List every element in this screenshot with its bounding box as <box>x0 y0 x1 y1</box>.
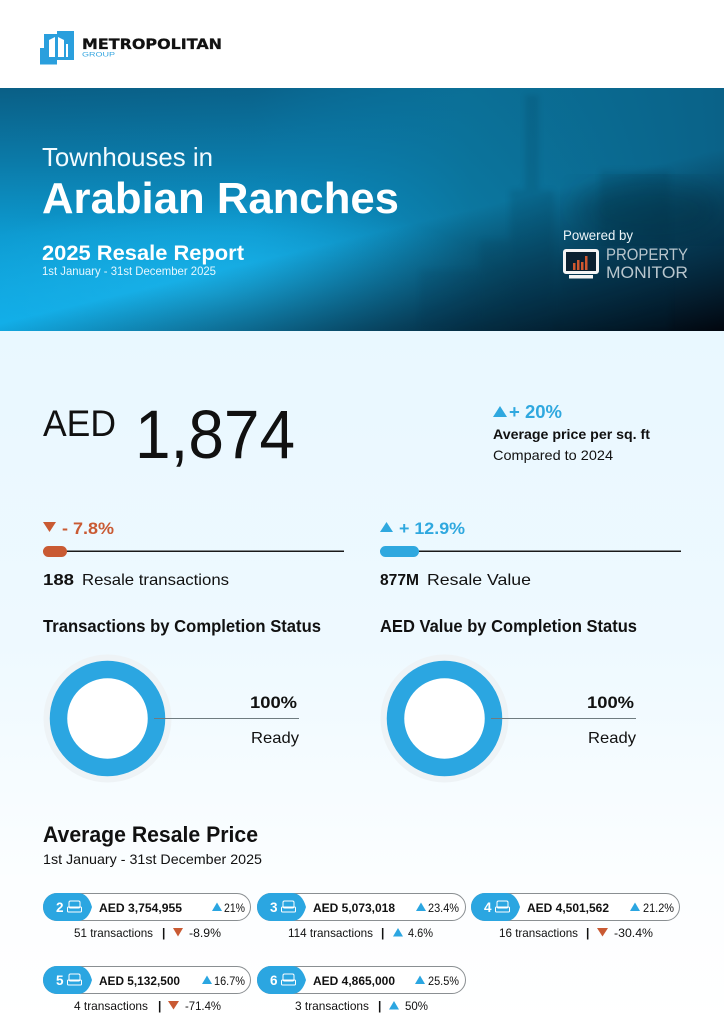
price card: 6 bedrooms: 50% <box>405 999 428 1013</box>
change value: + 12.9% <box>399 519 465 538</box>
icon: logo mark <box>40 31 74 64</box>
price card: 5 bedrooms <box>43 966 250 1013</box>
price card: 2 bedrooms: AED 3,754,955 <box>99 901 182 915</box>
price card: 3 bedrooms: AED 5,073,018 <box>313 901 395 915</box>
price card: 3 bedrooms: 114 transactions <box>288 926 373 940</box>
price card: 6 bedrooms: | <box>378 999 381 1013</box>
powered by Property Monitor <box>563 227 688 282</box>
price card: 5 bedrooms: -71.4% <box>185 999 221 1013</box>
price card: 5 bedrooms: 16.7% <box>214 974 245 988</box>
currency: AED <box>43 403 116 444</box>
price card: 6 bedrooms: AED 4,865,000 <box>313 974 395 988</box>
price card: 4 bedrooms: AED 4,501,562 <box>527 901 609 915</box>
stat: resale transactions <box>43 519 344 589</box>
price card: 5 bedrooms: AED 5,132,500 <box>99 974 180 988</box>
icon: bed <box>282 901 296 912</box>
price card: 4 bedrooms: 21.2% <box>643 901 674 915</box>
heading: average resale price: Average Resale Price <box>43 822 258 847</box>
price card: 2 bedrooms: 51 transactions <box>74 926 153 940</box>
progress bar <box>43 546 344 557</box>
dark glow <box>575 180 724 240</box>
change label: Average price per sq. ft <box>493 426 650 442</box>
value: 877M <box>380 572 419 589</box>
price card: 3 bedrooms: 3 <box>270 900 278 915</box>
price card: 2 bedrooms: | <box>162 926 165 940</box>
comparison label: Compared to 2024 <box>493 447 613 463</box>
title line 2: Arabian Ranches <box>42 174 399 223</box>
change value: - 7.8% <box>62 519 114 538</box>
icon: bed <box>496 901 510 912</box>
donut chart: value <box>380 654 636 782</box>
price card: 4 bedrooms: | <box>586 926 589 940</box>
price card: 3 bedrooms <box>257 893 466 940</box>
price card: 5 bedrooms: | <box>158 999 161 1013</box>
icon: bed <box>68 974 82 985</box>
price value: 1,874 <box>135 396 295 473</box>
icon: up arrow <box>380 522 393 532</box>
skyline silhouette <box>512 97 664 236</box>
price card: 4 bedrooms <box>471 893 680 940</box>
label: Resale Value <box>427 572 531 589</box>
report dates: 1st January - 31st December 2025 <box>42 264 216 278</box>
hero banner <box>0 88 724 331</box>
wordmark sub-line: GROUP <box>82 52 115 58</box>
price card: 5 bedrooms: 5 <box>56 973 64 988</box>
price card: 2 bedrooms: -8.9% <box>189 926 221 940</box>
logo: Metropolitan Group <box>40 31 222 64</box>
title line 1: Townhouses in <box>42 142 213 172</box>
price card: 4 bedrooms: -30.4% <box>614 926 653 940</box>
percent: 100% <box>250 693 297 712</box>
price card: 6 bedrooms <box>257 966 466 1013</box>
price change callout <box>493 402 650 463</box>
price card: 4 bedrooms: 16 transactions <box>499 926 578 940</box>
label: Resale transactions <box>82 572 229 589</box>
icon: monitor <box>564 250 598 278</box>
headline price <box>43 396 295 473</box>
stat: resale value <box>380 519 681 589</box>
price card: 6 bedrooms: 6 <box>270 973 278 988</box>
brand line 2: MONITOR <box>606 263 688 282</box>
icon: down arrow <box>43 522 56 532</box>
price card: 6 bedrooms: 25.5% <box>428 974 459 988</box>
price card: 6 bedrooms: 3 transactions <box>295 999 369 1013</box>
icon: bed <box>282 974 296 985</box>
price card: 3 bedrooms: 23.4% <box>428 901 459 915</box>
icon: bed <box>68 901 82 912</box>
heading: value by status: AED Value by Completion Status <box>380 616 637 636</box>
donut chart: transactions <box>44 654 299 782</box>
price card: 5 bedrooms: 4 transactions <box>74 999 148 1013</box>
progress bar <box>380 546 681 557</box>
heading: transactions by status: Transactions by Completion Status <box>43 616 321 636</box>
icon: up arrow <box>493 406 507 417</box>
price card: 3 bedrooms: | <box>381 926 384 940</box>
date range: 1st January - 31st December 2025 <box>43 851 262 867</box>
hero title <box>42 142 399 278</box>
price card: 2 bedrooms: 21% <box>224 901 245 915</box>
change value: + 20% <box>509 402 562 422</box>
status: Ready <box>251 730 299 747</box>
status: Ready <box>588 730 636 747</box>
price card: 2 bedrooms <box>43 893 250 940</box>
count: 188 <box>43 572 74 589</box>
price card: 3 bedrooms: 4.6% <box>408 926 433 940</box>
price card: 2 bedrooms: 2 <box>56 900 64 915</box>
powered by label: Powered by <box>563 227 633 243</box>
percent: 100% <box>587 693 634 712</box>
wordmark: METROPOLITAN <box>82 37 222 53</box>
report title: 2025 Resale Report <box>42 242 244 265</box>
brand line 1: PROPERTY <box>606 245 688 264</box>
price card: 4 bedrooms: 4 <box>484 900 492 915</box>
